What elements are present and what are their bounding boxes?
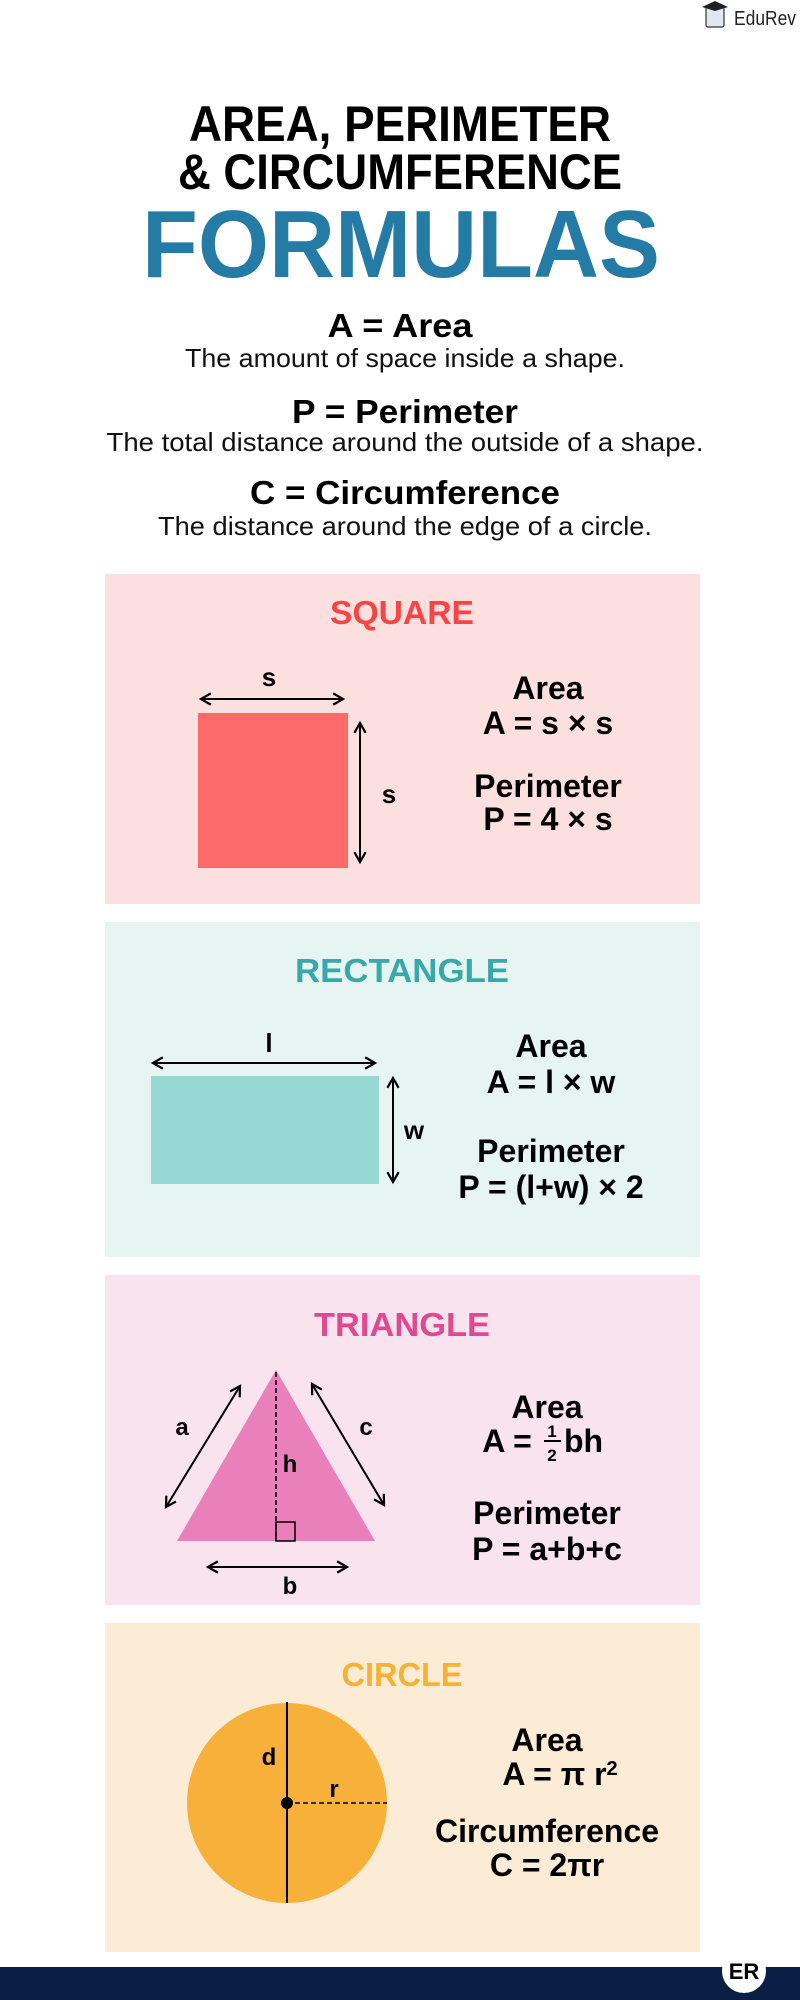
icon: ER badge [722,1949,766,1993]
formulas: rectangle: Perimeter [477,1133,625,1169]
heading: circle: CIRCLE [342,1656,462,1693]
formulas: circle: Circumference [435,1813,659,1849]
panel: triangle: a [175,1414,189,1441]
arrow: side a [166,1386,240,1507]
formulas: triangle: 2 [547,1446,557,1465]
panel: circle: d [262,1744,276,1771]
formulas: rectangle: A = l × w [487,1064,615,1100]
definition: perimeter: P = Perimeter [292,393,518,430]
heading: triangle: TRIANGLE [314,1306,490,1343]
formulas: triangle: Area [511,1389,583,1425]
panel: rectangle [105,922,700,1257]
formulas: circle: 2 [607,1758,618,1780]
formulas: triangle: A = [482,1423,532,1459]
arrow: top side [201,698,343,700]
title: AREA, PERIMETER [189,96,611,152]
logo: EduRev [702,1,796,30]
formulas: circle: Area [511,1722,583,1758]
heading: square: SQUARE [330,594,474,631]
circle shape [187,1703,387,1903]
formulas: square [474,670,622,837]
formulas: circle: C = 2πr [490,1847,604,1883]
footer bar [0,1949,800,2000]
formulas: circle [435,1722,659,1883]
arrow: right side [359,723,361,862]
definition: area [185,307,625,373]
panel: square: s [262,662,276,692]
definition: circumference [158,474,652,541]
title: & CIRCUMFERENCE [178,144,622,200]
formulas: circle: A = π r [502,1756,607,1792]
arrow: length [153,1062,375,1064]
formulas: triangle [472,1389,622,1567]
definition: area: The amount of space inside a shape. [185,343,625,373]
arrow: base b [208,1566,347,1568]
rectangle shape [151,1076,379,1184]
panel: triangle: h [283,1451,297,1478]
title [142,96,660,298]
panel: square [105,574,700,904]
definition: circumference: C = Circumference [250,474,560,511]
formulas: triangle: P = a+b+c [472,1531,622,1567]
formulas: rectangle: Area [515,1028,587,1064]
arrow: side c [312,1384,384,1505]
footer bar: ER [729,1959,759,1984]
definition: perimeter [106,393,704,457]
formulas: square: Area [512,670,584,706]
triangle shape [177,1370,375,1541]
panel: triangle: b [283,1573,297,1600]
title: FORMULAS [142,191,660,298]
arrow: width [392,1078,394,1182]
square shape [198,713,348,868]
heading: rectangle: RECTANGLE [295,952,509,989]
panel: rectangle: w [403,1115,425,1145]
panel: square: s [382,779,396,809]
radius line [287,1802,387,1804]
panel: triangle: c [359,1414,373,1441]
panel: circle [105,1623,700,1952]
formulas: rectangle: P = (l+w) × 2 [458,1169,644,1205]
panel: rectangle: l [265,1028,273,1058]
definition: perimeter: The total distance around the outside of a shape. [106,427,704,457]
height line [275,1372,277,1541]
definition: area: A = Area [328,307,473,344]
formulas: square: Perimeter [474,768,622,804]
formulas: triangle: bh [564,1423,603,1459]
panel: triangle [105,1275,700,1605]
formulas: triangle: Perimeter [473,1495,621,1531]
diameter line [286,1702,288,1903]
formulas: square: A = s × s [483,705,613,741]
definition: circumference: The distance around the edge of a circle. [158,511,652,541]
formulas: rectangle [458,1028,644,1205]
formulas: square: P = 4 × s [483,801,613,837]
panel: circle: r [329,1776,339,1803]
formulas: triangle: 1 [547,1422,557,1441]
